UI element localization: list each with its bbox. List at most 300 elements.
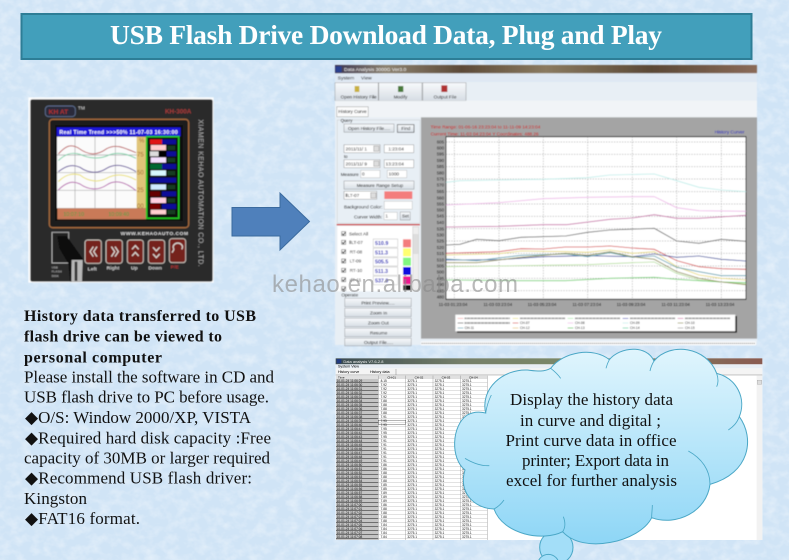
table rows: 7.92 (381, 383, 387, 387)
history curve chart: 505 (437, 263, 445, 268)
history curve chart: 520 (437, 245, 445, 250)
table rows: 3275.1 (462, 443, 472, 447)
window controls panel: Measure Range Setup (357, 183, 404, 188)
history curve chart: 595 (437, 152, 445, 157)
table rows: 3275.1 (407, 399, 417, 403)
body requirements: ◆O/S: Window 2000/XP, VISTA (25, 408, 252, 427)
table rows: 3275.1 (407, 503, 417, 507)
history curve chart: 11-03 11:23:04 (661, 302, 690, 307)
table rows: 10-01-24 11:06:51 (337, 467, 362, 471)
table rows: 3275.1 (435, 387, 445, 391)
table rows: 3275.1 (407, 523, 417, 527)
window controls panel: Output File..... (364, 340, 393, 345)
arrow pointing right (232, 193, 310, 250)
channel list: 510.9 (375, 241, 388, 247)
table rows: 3275.1 (407, 391, 417, 395)
table rows: 3275.1 (435, 443, 445, 447)
window controls panel: 13:23:04 (386, 161, 404, 166)
table rows: 7.92 (381, 387, 387, 391)
table rows: 10-01-24 11:06:47 (337, 451, 362, 455)
screenshot: Data Analysis history curve window (335, 65, 757, 346)
history curve chart: 11-03 13:23:04 (706, 302, 735, 307)
table rows: 3275.1 (407, 459, 417, 463)
window controls panel: Query (341, 118, 353, 123)
table rows: 3275.1 (435, 523, 445, 527)
table rows: 10-01-24 11:07:03 (337, 515, 362, 519)
chart legend: CH-12 (520, 326, 530, 330)
table rows: 3275.1 (462, 387, 472, 391)
screenshot: history data table window: CH-01 (387, 376, 396, 380)
device photo: KH-300A recorder: 10:07:10 (63, 212, 84, 218)
history curve chart: 560 (437, 195, 445, 200)
history curve chart: 550 (437, 208, 445, 213)
window controls panel: Data Analysis 3000G Ver3.0 (344, 67, 407, 73)
table rows: 3275.1 (407, 411, 417, 415)
table rows: 10-01-24 11:06:42 (337, 431, 362, 435)
table rows: 3275.1 (462, 455, 472, 459)
table rows: 3275.1 (462, 471, 472, 475)
table rows: 10-01-24 11:06:52 (337, 471, 362, 475)
screenshot: history data table window (336, 358, 762, 540)
device photo: KH-300A recorder: DISK (52, 274, 60, 278)
heading: history data: flash drive can be viewed to (24, 329, 222, 346)
table rows: 10-01-24 11:06:29 (337, 379, 362, 383)
table rows: 3275.1 (462, 407, 472, 411)
window controls panel: Zoom Out (368, 320, 389, 325)
table rows: 3275.1 (435, 439, 445, 443)
window controls panel: Output File (434, 94, 457, 99)
table rows: 10-01-24 11:06:46 (337, 447, 362, 451)
table rows: 7.88 (381, 471, 387, 475)
table rows: 3275.1 (462, 467, 472, 471)
history curve chart: 575 (437, 177, 445, 182)
window controls panel: ⅡLT-07 (345, 193, 360, 198)
table rows: 3275.1 (462, 423, 472, 427)
screenshot: history data table window: CH-04 (469, 376, 478, 380)
table rows: 3275.1 (407, 531, 417, 535)
table rows: 10-01-24 11:06:37 (337, 411, 362, 415)
table rows: 10-01-24 11:06:38 (337, 415, 362, 419)
table rows (337, 379, 472, 539)
window controls panel: View (361, 76, 372, 82)
table rows: 3275.1 (407, 431, 417, 435)
history curve chart: 11-03 03:23:04 (483, 302, 513, 307)
table rows: 7.85 (381, 487, 387, 491)
channel list: dT-11 (350, 277, 362, 282)
table rows: 3275.1 (435, 467, 445, 471)
device photo: KH-300A recorder: 00 (137, 204, 144, 210)
table rows: 10-01-24 11:06:31 (337, 387, 362, 391)
history curve chart: 490 (437, 282, 445, 287)
window controls panel: 1000 (389, 172, 399, 177)
cloud text: Display the history data (510, 390, 673, 409)
table rows: 10-01-24 11:07:00 (337, 503, 362, 507)
table rows: 3275.1 (435, 499, 445, 503)
table rows: 3275.1 (435, 459, 445, 463)
table rows: 3275.1 (435, 475, 445, 479)
table rows: 3275.1 (407, 535, 417, 539)
history curve chart: 11-03 05:23:04 (528, 302, 557, 307)
table rows: 7.95 (381, 427, 387, 431)
channel list: RT-08 (350, 249, 363, 254)
window controls panel: 2011/11/ 1 (346, 146, 367, 151)
table rows: 3275.1 (462, 519, 472, 523)
table rows: 7.89 (381, 491, 387, 495)
screenshot: history data table window: History data (370, 370, 390, 374)
table rows: 3275.1 (435, 535, 445, 539)
table rows: 3275.1 (435, 431, 445, 435)
table rows: 7.86 (381, 467, 387, 471)
table rows: 10-01-24 11:06:59 (337, 499, 362, 503)
table rows: 3275.1 (462, 403, 472, 407)
table rows: 10-01-24 11:07:04 (337, 519, 362, 523)
table rows: 3275.1 (435, 399, 445, 403)
table rows: 3275.1 (435, 479, 445, 483)
table rows: 3275.1 (407, 455, 417, 459)
window controls panel: 0 (362, 172, 365, 177)
table rows: 10-01-24 11:06:39 (337, 419, 362, 423)
table rows: 3275.1 (462, 431, 472, 435)
table rows: 3275.1 (462, 395, 472, 399)
table rows: 7.95 (381, 419, 387, 423)
table rows: 7.88 (381, 411, 387, 415)
history curve chart: 555 (437, 201, 445, 206)
table rows: 3275.1 (435, 391, 445, 395)
body requirements: ◆FAT16 format. (25, 509, 140, 528)
table rows: 3275.1 (407, 383, 417, 387)
table rows: 3275.1 (407, 427, 417, 431)
table rows: 10-01-24 11:06:35 (337, 403, 362, 407)
table rows: 7.86 (381, 463, 387, 467)
table rows: 3275.1 (435, 515, 445, 519)
window controls panel: Zoom In (370, 310, 387, 315)
table rows: 7.89 (381, 495, 387, 499)
table rows: 10-01-24 11:06:53 (337, 475, 362, 479)
table rows: 10-01-24 11:06:48 (337, 455, 362, 459)
table rows: 7.84 (381, 527, 387, 531)
table rows: 3275.1 (462, 399, 472, 403)
table rows: 7.88 (381, 407, 387, 411)
table rows: 10-01-24 11:06:34 (337, 399, 362, 403)
table rows: 3275.1 (407, 407, 417, 411)
history curve chart: 510 (437, 257, 445, 262)
history curve chart: 600 (437, 146, 445, 151)
table rows: 3275.1 (435, 403, 445, 407)
table rows: 3275.1 (435, 395, 445, 399)
table rows: 3275.1 (407, 439, 417, 443)
table rows: 3275.1 (407, 451, 417, 455)
history curve chart: Current Time: 11-03 04:23:04 Y Coordinates: 488.26 (431, 131, 539, 136)
chart legend: CH-13 (575, 326, 585, 330)
heading: history data (24, 308, 256, 366)
table rows: 7.91 (381, 439, 387, 443)
table rows: 7.84 (381, 523, 387, 527)
table rows: 7.95 (381, 435, 387, 439)
window controls panel: Modify (394, 94, 408, 99)
channel list: RT-10 (350, 268, 363, 273)
history curve chart: 495 (437, 276, 445, 281)
device photo: KH-300A recorder: 50 (137, 170, 144, 176)
table rows: 3275.1 (435, 491, 445, 495)
cloud text: in curve and digital ; (520, 411, 661, 430)
channel list: 537.9 (375, 278, 388, 284)
device photo: KH-300A recorder: 10:09:40 (108, 212, 129, 218)
table rows: 3275.1 (407, 379, 417, 383)
window controls panel (335, 65, 757, 346)
chart legend: CH-11 (465, 326, 474, 330)
table rows: 3275.1 (407, 499, 417, 503)
table rows: 7.91 (381, 415, 387, 419)
table rows: 3275.1 (435, 455, 445, 459)
table rows: 10-01-24 11:06:55 (337, 483, 362, 487)
table rows: 3275.1 (435, 463, 445, 467)
table rows: 7.88 (381, 403, 387, 407)
body requirements: Please install the software in CD and (24, 367, 274, 386)
table rows: 10-01-24 11:06:56 (337, 487, 362, 491)
table rows: 3275.1 (435, 495, 445, 499)
table rows: 3275.1 (435, 507, 445, 511)
table rows: 7.95 (381, 423, 387, 427)
table rows: 7.85 (381, 483, 387, 487)
history curve chart: 11-03 09:23:04 (617, 302, 646, 307)
body requirements: Kingston (24, 489, 88, 508)
table rows: 7.88 (381, 507, 387, 511)
heading: history data: History data transferred to USB (24, 308, 256, 325)
table rows: 3275.1 (435, 511, 445, 515)
table rows: 3275.1 (462, 475, 472, 479)
table rows: 7.86 (381, 503, 387, 507)
window controls panel: to (344, 154, 348, 159)
body requirements (24, 367, 274, 528)
table rows: 3275.1 (407, 507, 417, 511)
table rows: 3275.1 (435, 451, 445, 455)
table rows: 7.88 (381, 479, 387, 483)
table rows: 3275.1 (407, 527, 417, 531)
cloud body (455, 349, 748, 544)
cloud tail bubbles (538, 531, 573, 560)
description text block (24, 308, 274, 528)
table rows: 10-01-24 11:06:44 (337, 439, 362, 443)
table rows: 7.84 (381, 531, 387, 535)
table rows: 3275.1 (407, 471, 417, 475)
table rows: 10-01-24 11:06:30 (337, 383, 362, 387)
cloud text: Print curve data in office (506, 431, 676, 450)
watermark: kehao.en.alibaba.com (272, 271, 518, 298)
channel list: 511.3 (375, 250, 388, 256)
device photo: KH-300A recorder: Down (148, 265, 162, 271)
window controls panel: 1 (385, 214, 388, 219)
table rows: 3275.1 (462, 495, 472, 499)
table rows: 7.91 (381, 443, 387, 447)
table rows: 3275.1 (407, 463, 417, 467)
window controls panel: Measure (341, 172, 359, 177)
table rows: 8.15 (381, 379, 387, 383)
table rows: 3275.1 (462, 483, 472, 487)
history curve chart: 525 (437, 239, 445, 244)
table rows: 10-01-24 11:06:40 (337, 423, 362, 427)
table rows: 7.91 (381, 447, 387, 451)
window controls panel: Curver Width: (354, 215, 382, 220)
table rows: 10-01-24 11:07:08 (337, 535, 362, 539)
device photo: KH-300A recorder: P/E (171, 265, 179, 271)
table rows: 3275.1 (462, 463, 472, 467)
window controls panel: 1:23:04 (388, 146, 404, 151)
table rows: 3275.1 (407, 419, 417, 423)
table rows: 7.95 (381, 431, 387, 435)
history curve chart: 11-03 01:23:04 (439, 302, 468, 307)
table rows: 3275.1 (462, 391, 472, 395)
table rows: 7.88 (381, 519, 387, 523)
table rows: 3275.1 (435, 415, 445, 419)
history curve chart: Time Range: 01-06-16 23:23:04 to 11-11-09 14:23:04 (431, 125, 541, 130)
table rows: 3275.1 (462, 411, 472, 415)
window controls panel: Background Color: (344, 205, 383, 210)
history curve chart: 570 (437, 183, 445, 188)
table rows: 7.88 (381, 511, 387, 515)
chart legend: CH-08 (575, 321, 585, 325)
heading: history data: personal computer (24, 349, 162, 366)
history curve chart: 530 (437, 232, 445, 237)
table rows: 3275.1 (407, 395, 417, 399)
cloud text: excel for further analysis (506, 471, 677, 490)
device photo: KH-300A recorder: Real Time Trend >>>50% 11-07-03 16:30:00 (59, 130, 178, 136)
history curve chart: 580 (437, 170, 445, 175)
table rows: 3275.1 (462, 503, 472, 507)
table rows: 7.84 (381, 535, 387, 539)
device photo: KH-300A recorder: % (139, 139, 145, 145)
history curve chart: 11-03 07:23:04 (572, 302, 602, 307)
history curve chart: 590 (437, 158, 445, 163)
table rows: 3275.1 (435, 423, 445, 427)
history curve chart: 500 (437, 270, 445, 275)
table rows: 10-01-24 11:06:33 (337, 395, 362, 399)
table rows: 3275.1 (407, 491, 417, 495)
channel list: Select All (349, 231, 368, 236)
channel list: LT-09 (350, 259, 362, 264)
screenshot: history data table window: Data analysis V7.6-2.8 (343, 359, 384, 364)
window controls panel: 2011/11/ 9 (346, 161, 367, 166)
table rows: 3275.1 (462, 435, 472, 439)
channel list: 511.3 (375, 269, 388, 275)
table rows: 3275.1 (462, 415, 472, 419)
history curve chart (421, 117, 757, 345)
history curve chart: 485 (437, 288, 445, 293)
table rows: 3275.1 (435, 379, 445, 383)
device photo: KH-300A recorder: FLASH (52, 270, 62, 274)
table rows: 10-01-24 11:06:58 (337, 495, 362, 499)
table rows: 7.88 (381, 399, 387, 403)
device photo: KH-300A recorder: 25 (137, 188, 144, 194)
title banner: USB Flash Drive Download Data, Plug and Play (110, 19, 662, 50)
table rows: 3275.1 (435, 419, 445, 423)
table rows: 10-01-24 11:06:32 (337, 391, 362, 395)
table rows: 3275.1 (407, 475, 417, 479)
table rows: 10-01-24 11:07:05 (337, 523, 362, 527)
table rows: 10-01-24 11:06:43 (337, 435, 362, 439)
screenshot: history data table window: CH-03 (442, 376, 451, 380)
title banner (22, 14, 752, 59)
table rows: 3275.1 (462, 447, 472, 451)
table rows: 10-01-24 11:06:54 (337, 479, 362, 483)
chart legend: CH-09 (630, 321, 640, 325)
history curve chart: 585 (437, 164, 445, 169)
channel list: ⅡLT-07 (349, 240, 363, 245)
table rows: 3275.1 (407, 435, 417, 439)
device photo: KH-300A recorder: WWW.KEHAOAUTO.COM (121, 231, 188, 237)
device photo: KH-300A recorder: 75 (137, 153, 144, 159)
table rows: 3275.1 (462, 479, 472, 483)
window controls panel: History Curve (338, 109, 367, 114)
chart legend: CH-10 (685, 321, 695, 325)
table rows: 3275.1 (462, 383, 472, 387)
table rows: 3275.1 (462, 523, 472, 527)
table rows: 3275.1 (407, 483, 417, 487)
table rows: 3275.1 (435, 487, 445, 491)
table rows: 3275.1 (435, 527, 445, 531)
table rows: 3275.1 (407, 515, 417, 519)
window controls panel: Print Preview..... (361, 300, 395, 305)
thought cloud callout (455, 349, 748, 560)
table rows: 3275.1 (407, 423, 417, 427)
device photo: KH-300A recorder: Up (131, 265, 138, 271)
screenshot: history data table window: History curve (338, 370, 359, 374)
chart legend: CH-15 (685, 326, 695, 330)
table rows: 3275.1 (462, 499, 472, 503)
table rows: 3275.1 (407, 415, 417, 419)
table rows: 7.92 (381, 391, 387, 395)
table rows: 3275.1 (435, 407, 445, 411)
history curve chart: 540 (437, 220, 445, 225)
table rows: 10-01-24 11:06:36 (337, 407, 362, 411)
table rows: 3275.1 (462, 507, 472, 511)
table rows: 7.91 (381, 451, 387, 455)
screenshot: history data table window: CH-02 (415, 376, 424, 380)
table rows: 10-01-24 11:06:45 (337, 443, 362, 447)
device photo: KH-300A recorder: KH-300A (165, 109, 192, 116)
table rows: 3275.1 (435, 427, 445, 431)
table rows: 3275.1 (407, 487, 417, 491)
cloud text (506, 390, 677, 490)
table rows: 10-01-24 11:07:06 (337, 527, 362, 531)
table rows: 3275.1 (407, 519, 417, 523)
window controls panel: Open History File..... (348, 126, 390, 131)
table rows: 3275.1 (435, 435, 445, 439)
table rows: 3275.1 (462, 427, 472, 431)
table rows: 10-01-24 11:06:49 (337, 459, 362, 463)
table rows: 3275.1 (462, 419, 472, 423)
device photo: KH-300A recorder: TM (78, 105, 85, 110)
table rows: 3275.1 (462, 515, 472, 519)
window controls panel: System (338, 76, 354, 82)
device photo: KH-300A recorder: USB (52, 265, 59, 269)
table rows: 3275.1 (435, 471, 445, 475)
screenshot: history data table window: Time (338, 376, 345, 380)
device photo: KH-300A recorder: Left (88, 266, 97, 272)
history curve chart: 480 (437, 294, 445, 299)
table rows: 10-01-24 11:06:57 (337, 491, 362, 495)
table rows: 3275.1 (407, 443, 417, 447)
channel list: 505.5 (375, 260, 388, 266)
device photo: KH-300A recorder: KH AT (49, 109, 68, 116)
table rows: 3275.1 (435, 483, 445, 487)
window controls panel: Find (401, 126, 411, 131)
table rows: 3275.1 (462, 531, 472, 535)
table rows: 3275.1 (462, 379, 472, 383)
table rows: 7.89 (381, 499, 387, 503)
table rows: 7.92 (381, 395, 387, 399)
table rows: 3275.1 (435, 447, 445, 451)
table rows: 7.91 (381, 459, 387, 463)
